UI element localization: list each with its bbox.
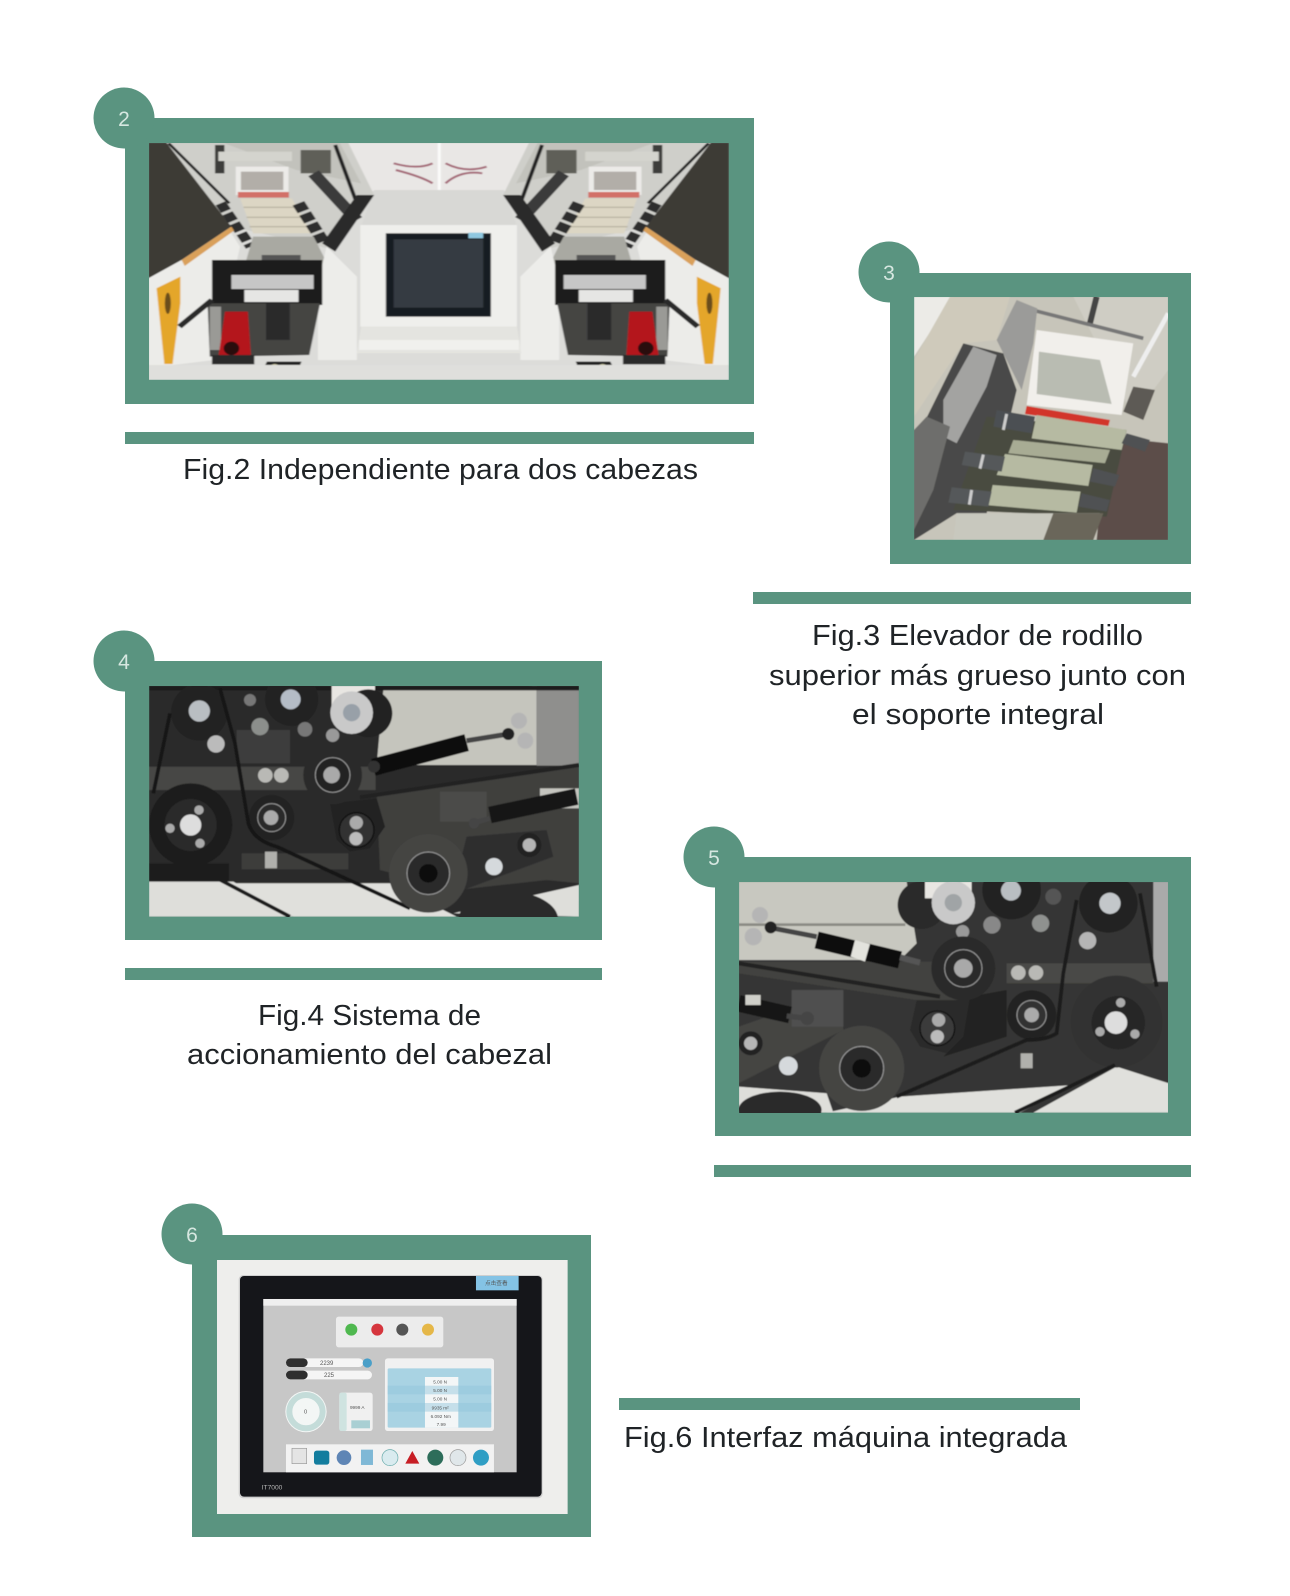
bar: Fig.2 [125, 432, 754, 444]
photo: two-head machine with touch screen [148, 143, 729, 380]
panel: Fig.3 [753, 242, 1191, 731]
photo: integrated machine interface: 0 [304, 1410, 307, 1416]
caption: Fig.2: Fig.2 Independiente para dos cabezas [183, 454, 698, 486]
badge: 3 [858, 242, 920, 302]
photo: upper roller lift [914, 297, 1168, 540]
badge: 3: 3 [883, 262, 895, 285]
frame: Fig.6 [192, 1235, 591, 1537]
badge: 2: 2 [118, 108, 130, 131]
photo: integrated machine interface: 2239 [320, 1361, 334, 1367]
photo: integrated machine interface: 5.00 N [433, 1379, 447, 1384]
photo: integrated machine interface: 9999 A [350, 1405, 365, 1410]
photo: integrated machine interface: 6.092 Nm [431, 1414, 451, 1419]
photo: integrated machine interface: 5.00 N [433, 1397, 447, 1402]
frame: Fig.2 [125, 118, 754, 404]
photo: integrated machine interface [217, 1260, 568, 1515]
photo: head drive system [149, 686, 579, 917]
badge: 5: 5 [708, 847, 720, 870]
badge: 6 [162, 1204, 222, 1264]
badge: 4 [94, 630, 154, 692]
bar: Fig.5 [714, 1165, 1191, 1177]
caption: Fig.4: accionamiento del cabezal [187, 1039, 552, 1071]
photo: integrated machine interface: 点击查看 [485, 1279, 508, 1287]
photo: integrated machine interface: 225 [324, 1373, 335, 1379]
panel: Fig.5 [684, 826, 1191, 1177]
infographic canvas [94, 88, 1191, 1537]
frame: Fig.4 [125, 661, 602, 940]
panel: Fig.6 [162, 1204, 1080, 1537]
frame: Fig.3 [890, 273, 1191, 564]
caption: Fig.3 [769, 620, 1186, 731]
badge: 6: 6 [186, 1224, 198, 1247]
badge: 4: 4 [118, 651, 130, 674]
panel: Fig.4 [94, 630, 602, 1071]
bar: Fig.6 [619, 1398, 1080, 1410]
caption: Fig.6: Fig.6 Interfaz máquina integrada [624, 1422, 1068, 1454]
caption: Fig.3: superior más grueso junto con [769, 660, 1186, 692]
badge: 5 [684, 826, 744, 888]
caption: Fig.4 [187, 1000, 552, 1071]
photo: integrated machine interface: IT7000 [262, 1485, 283, 1492]
photo: integrated machine interface: 7.99 [437, 1422, 446, 1427]
photo: integrated machine interface: 5.00 N [433, 1388, 447, 1393]
caption: Fig.3: el soporte integral [852, 699, 1104, 731]
panel: Fig.2 [94, 88, 754, 486]
photo: integrated machine interface: 9935 m² [432, 1405, 449, 1410]
badge: 2 [94, 88, 154, 148]
caption: Fig.4: Fig.4 Sistema de [258, 1000, 481, 1032]
caption: Fig.3: Fig.3 Elevador de rodillo [812, 620, 1143, 652]
photo: mirrored drive system [739, 882, 1168, 1113]
bar: Fig.3 [753, 592, 1191, 604]
bar: Fig.4 [125, 968, 602, 980]
frame: Fig.5 [715, 857, 1191, 1136]
